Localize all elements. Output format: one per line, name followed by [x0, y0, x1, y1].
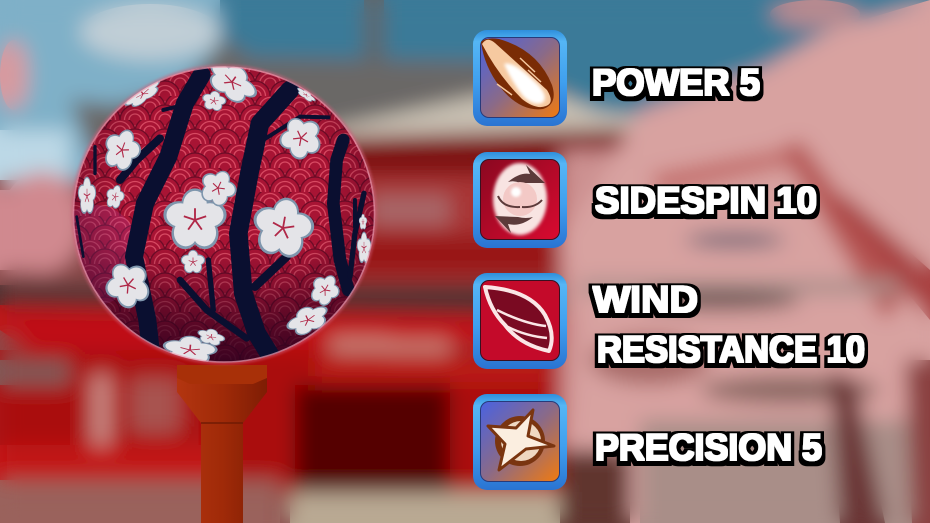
icon: precision	[473, 394, 567, 490]
label: power: POWER 5	[592, 62, 760, 103]
icon: power comet	[473, 30, 567, 126]
label: wind resistance: RESISTANCE 10	[597, 329, 865, 370]
golf tee	[177, 365, 267, 523]
label: precision: PRECISION 5	[595, 427, 822, 468]
blossoms	[78, 52, 371, 366]
label: wind resistance	[593, 279, 865, 370]
golf ball with cherry blossom pattern	[70, 64, 378, 366]
tree branches	[77, 75, 364, 355]
label: wind resistance: WIND	[593, 279, 698, 320]
icon: sidespin	[473, 152, 567, 248]
icon: wind wing	[473, 273, 567, 369]
label: sidespin: SIDESPIN 10	[595, 180, 817, 221]
